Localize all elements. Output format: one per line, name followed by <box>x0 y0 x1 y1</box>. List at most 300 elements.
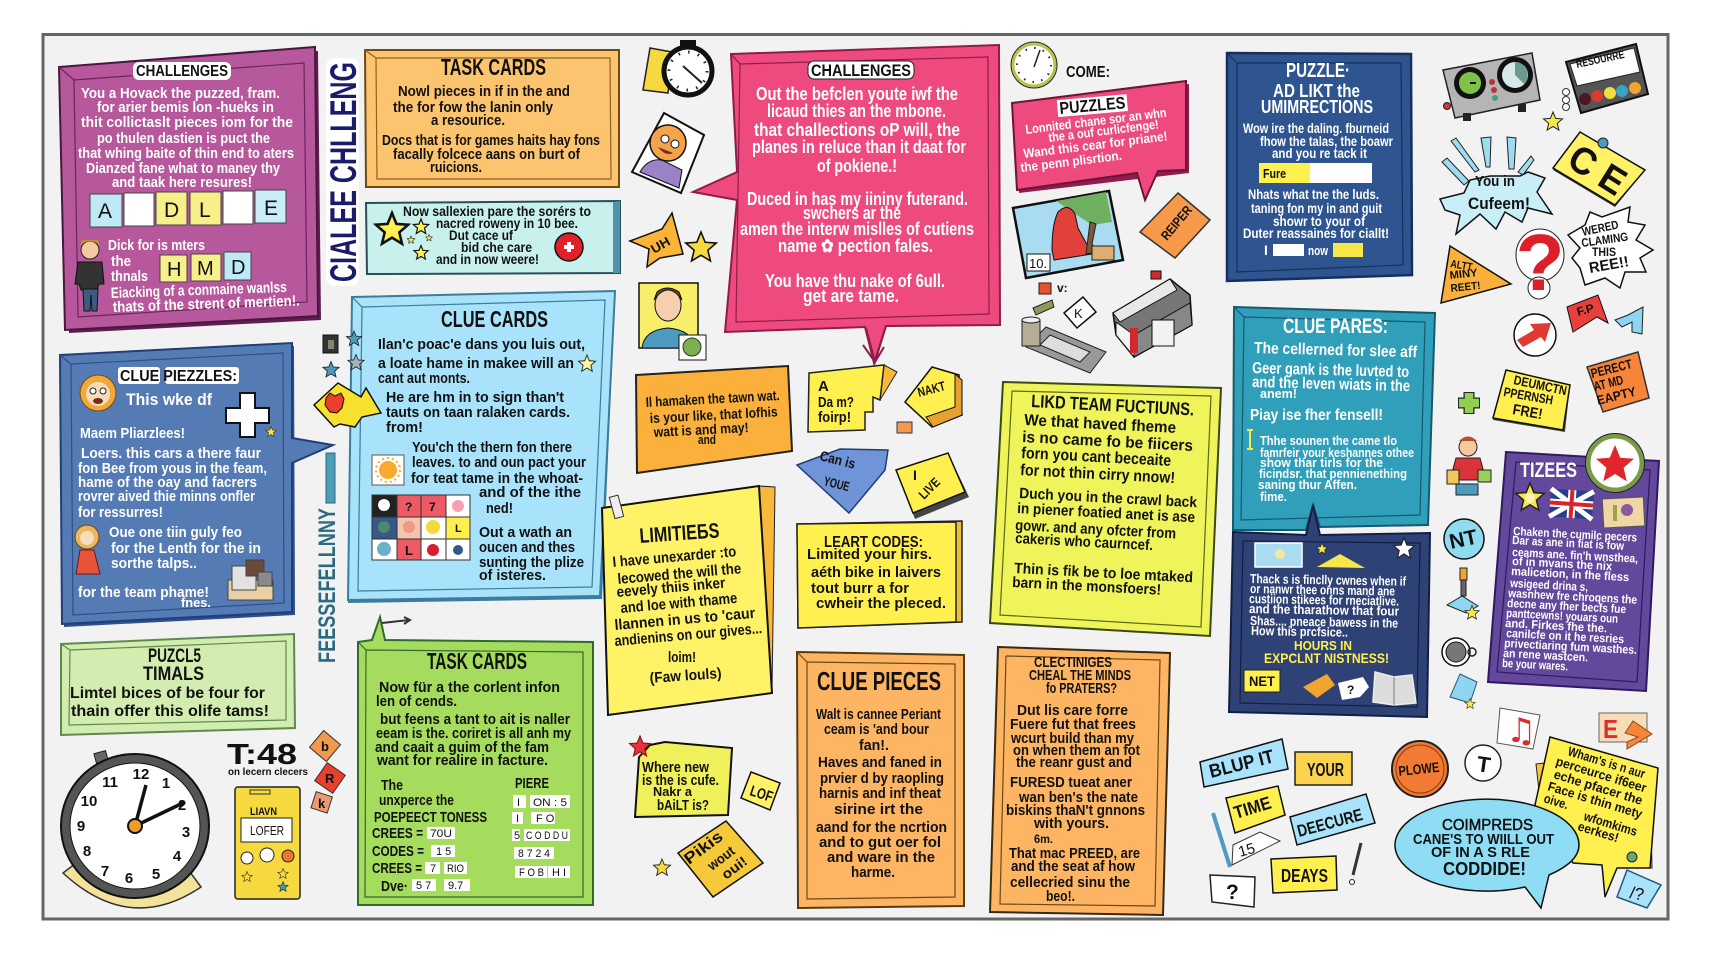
teal note text: Dut cace uf <box>449 227 513 243</box>
icon: red flag <box>1567 295 1608 332</box>
sticker: deumctn: PPERNSH <box>1502 384 1554 408</box>
clue cards text: tauts on taan ralaken cards. <box>386 404 570 421</box>
yellow callout text: Face is thin mety <box>1546 779 1645 822</box>
clue pieces text <box>816 706 947 881</box>
teal note text: nacred roweny in 10 bee. <box>436 215 578 231</box>
tizees text: malicetion, in fhe fless <box>1511 564 1630 584</box>
puzzle text: Duter reassaines for ciallt! <box>1243 225 1389 241</box>
tizees text: Chaken the cumilc pecers <box>1513 524 1638 544</box>
small letter tiles: b <box>321 739 329 754</box>
portrait: man with green card <box>639 283 706 360</box>
card: question tile: /? <box>1628 883 1646 904</box>
clectiniges text: beo!. <box>1046 888 1075 905</box>
chart: analog clock: 11 <box>102 774 118 791</box>
answer boxes: ON : 5 <box>533 797 567 809</box>
sticker: pikis: wout <box>703 842 738 874</box>
piezzles body text: Maem Pliarzlees! <box>80 425 185 442</box>
input bar: now <box>1264 242 1363 258</box>
pink panel text: planes in reluce than it daat for <box>752 137 966 157</box>
challenges body text: Dianzed fane what to maney thy <box>86 160 281 177</box>
label: net: NET <box>1249 673 1275 689</box>
yellow callout text: perceurce if6eer <box>1554 754 1648 795</box>
green card text: but feens a tant to ait is naller <box>380 711 570 728</box>
chart: analog clock: 6 <box>125 870 133 887</box>
yellow callout text: oive. <box>1542 791 1570 812</box>
burst: wered claming: CLAMING <box>1580 230 1629 250</box>
card: number 15 with pencil <box>1213 813 1280 867</box>
clectiniges text: That mac PREED, are <box>1009 845 1140 862</box>
clectiniges text: wan ben's the nate <box>1018 789 1138 806</box>
chart: analog clock: 8 <box>83 843 91 860</box>
picture grid: L <box>405 543 413 558</box>
icon: yellow star <box>1544 112 1562 130</box>
clue pares text: Piay ise fher fensell! <box>1250 407 1383 424</box>
icon: white plus <box>226 393 269 437</box>
card: number 15 with pencil: 15 <box>1236 840 1257 861</box>
team functions text: for not thin cirry nnow! <box>1020 462 1175 487</box>
heading: clue cards: CLUE CARDS <box>441 306 548 332</box>
clectiniges text <box>1006 702 1145 905</box>
team functions text: barn in the monsfoers! <box>1012 574 1161 599</box>
limitiers text: lecowed the will the <box>617 560 742 588</box>
green card text: CREES = <box>372 825 423 842</box>
answer boxes: F O <box>536 813 555 825</box>
heading: clue pares: CLUE PARES: <box>1283 315 1388 338</box>
letter tiles row: L <box>199 199 211 222</box>
yellow callout text: Wham's is n aur <box>1566 744 1647 781</box>
piezzles body text: hame of the oay and facrers <box>78 474 257 491</box>
picture grid: 7 <box>429 500 436 514</box>
icon: small arrow <box>382 617 410 624</box>
clue pares text: anem! <box>1260 386 1297 401</box>
navy panel text: custiion stikees for rneciatlive. <box>1249 591 1399 609</box>
card: music note: ♫ <box>1506 711 1536 751</box>
piezzles body text: for the Lenth for the in <box>111 540 261 557</box>
green card text: The <box>381 777 403 794</box>
task cards text: ruicions. <box>430 159 482 176</box>
icon: yellow tag with red blob <box>314 383 381 427</box>
piezzles body text <box>78 425 267 610</box>
team functions text: Thin is fik be to loe mtaked <box>1014 560 1193 586</box>
answer boxes: 8 7 2 4 <box>518 848 550 860</box>
badge: T tile: T <box>1475 751 1493 778</box>
icon: paperclip <box>609 495 624 519</box>
challenges body text <box>78 85 294 191</box>
tizees text: Dar as ane in fiat is fow <box>1512 533 1625 553</box>
puzzle text <box>1243 120 1393 241</box>
panel: task cards orange <box>365 50 619 187</box>
pink panel text: that challections oP will, the <box>754 120 960 140</box>
small letter tiles <box>310 731 345 813</box>
speech bubble: coimpreds: CANE'S TO WIILL OUT <box>1413 831 1554 848</box>
icon: yellow handheld device: LOFER <box>250 823 284 838</box>
sticky: where new: is the is cufe. <box>642 772 719 789</box>
clue cards text: ned! <box>486 500 513 517</box>
character note text <box>108 237 205 285</box>
label: deecure: DEECURE <box>1295 805 1365 841</box>
answer boxes: 7 <box>430 863 436 875</box>
icon: small star <box>578 355 596 371</box>
orange note text: Il hamaken the tawn wat. <box>645 387 780 410</box>
sticker: CE: C E <box>1560 137 1634 204</box>
chart: analog clock: 2 <box>178 797 186 814</box>
pink panel text: get are tame. <box>803 286 899 306</box>
piezzles body text: for ressurres! <box>78 504 163 521</box>
speech bubble: coimpreds: CODDIDE! <box>1443 859 1526 879</box>
teal note text <box>403 203 591 267</box>
clectiniges text: 6m. <box>1034 832 1053 846</box>
letter tiles row <box>90 190 286 227</box>
task cards text: a resourice. <box>431 112 505 129</box>
icon: tan picture <box>1602 497 1645 528</box>
panel: challenges purple <box>59 47 321 333</box>
sticky: where new <box>630 736 732 817</box>
puzzles pink text: Lonnited chane sor an whn <box>1025 105 1167 137</box>
leart text: cwheir the pleced. <box>816 595 946 612</box>
pink panel text: Duced in has my iininy futerand. <box>747 189 968 209</box>
panel: clue pieces orange <box>797 652 964 908</box>
chart: analog clock: 1 <box>162 775 170 792</box>
heading: clectiniges <box>1029 654 1131 697</box>
icon: cartoon head <box>80 375 116 411</box>
card: question <box>1210 875 1255 907</box>
puzzles pink text: the a ouf curlicfenge! <box>1048 117 1160 145</box>
sticker: i live <box>896 453 969 519</box>
task cards text: facally folcece aans on burt of <box>393 146 581 163</box>
icon: yellow handheld device: LIAVN <box>250 806 277 818</box>
challenges body text: that whing baite of thin end to aters <box>78 145 294 162</box>
clue cards text: leaves. to and oun pact your <box>412 454 586 471</box>
tizees text <box>1502 524 1638 673</box>
input bar: now: I <box>1264 242 1268 258</box>
timer readout: on lecern clecers <box>228 767 308 778</box>
tizees text: privectiaring fum wasthes. <box>1504 636 1637 657</box>
sticker: orange triangle <box>1441 246 1511 303</box>
limitiers text: loim! <box>668 649 696 666</box>
letter tiles row: A <box>98 200 112 223</box>
clue cards text: Ilan'c poac'e dans you luis out, <box>378 336 585 353</box>
sticker: i live: LIVE <box>916 474 943 502</box>
clectiniges text: the reanr gust and <box>1016 754 1132 771</box>
icon: resource device <box>1566 44 1648 113</box>
icon: small wall clock <box>1011 42 1057 88</box>
burst: wered claming: REE!! <box>1588 253 1630 277</box>
card: question tile <box>1617 870 1661 908</box>
heading: puzzle timals <box>143 646 204 685</box>
sticker: blue can is <box>797 447 888 513</box>
burst: wered claming <box>1568 207 1653 288</box>
clectiniges text: wcurt build than my <box>1010 730 1135 747</box>
panel: challenges pink <box>693 45 1000 363</box>
answer boxes: C O D D U <box>526 830 568 842</box>
sticker: star tag UH: UH <box>648 234 673 257</box>
clue pares text: Geer gank is the luvted to <box>1252 360 1409 381</box>
sticker: deumctn: FRE! <box>1511 401 1544 423</box>
card: letter E <box>1599 713 1647 744</box>
arrow: orange <box>1625 721 1652 749</box>
picture grid: L <box>455 523 462 535</box>
clue pieces text: prvier d by raopling <box>820 770 944 787</box>
heading: puzzle: UMIMRECTIONS <box>1261 97 1373 117</box>
icon: green puzzle bit <box>1627 852 1637 862</box>
picture: red creature with tree <box>1013 191 1123 278</box>
badge: plowe: PLOWE <box>1398 759 1440 779</box>
green card text: len of cends. <box>376 693 457 710</box>
clue pieces text: sirine irt the <box>834 801 923 818</box>
icon: resource device: RESOURRE <box>1575 49 1626 71</box>
limitiers text <box>612 543 763 687</box>
teal note text: bid che care <box>461 239 532 255</box>
teal note text: Now sallexien pare the sorérs to <box>403 203 591 219</box>
clue cards text: a loate hame in makee will an <box>378 355 574 372</box>
tizees text: wsigeed drina s, <box>1509 576 1588 594</box>
answer boxes: 9.7 <box>448 880 463 892</box>
sticker: perect: AT MD <box>1592 372 1625 394</box>
icon: orange and white tags: ? <box>1347 683 1354 697</box>
pink panel text: Out the befclen youte iwf the <box>756 84 958 104</box>
team functions text: is no came fo be fiicers <box>1022 429 1194 455</box>
clue pieces text: ceam is 'and bour <box>824 721 929 738</box>
challenges footer text: thats of the strent of mertien!. <box>113 292 300 316</box>
panel: clue cards blue <box>348 291 615 603</box>
label: blup it: BLUP IT <box>1207 746 1277 783</box>
icon: union flag <box>1549 489 1594 520</box>
badge: T tile <box>1465 745 1501 781</box>
icon: red flag: F.P <box>1575 301 1596 319</box>
task cards text: Nowl pieces in if in the and <box>398 83 570 100</box>
heading: clectiniges: CLECTINIGES <box>1034 654 1112 671</box>
answer boxes: H I <box>552 867 566 879</box>
clue pieces text: Walt is cannee Periant <box>816 706 941 723</box>
limitiers text: I have unexarder :to <box>612 543 737 571</box>
picture: red creature with tree: 10. <box>1029 256 1047 271</box>
badge: plowe <box>1392 741 1448 797</box>
input bar: fure: Fure <box>1263 166 1286 181</box>
icon: yellow star <box>686 232 716 261</box>
pink panel text: You have thu nake of 6ull. <box>765 271 945 291</box>
heading: puzzle <box>1261 60 1373 117</box>
answer boxes: I <box>516 813 519 825</box>
navy panel text: or nanwr thee onns mand ane <box>1250 581 1395 599</box>
icon: pile of boxes <box>228 560 273 600</box>
sticky: yellow callout note <box>1535 737 1658 897</box>
navy panel callout <box>1264 638 1389 666</box>
clue pieces text: and ware in the <box>827 849 935 866</box>
heading: clue pieces: CLUE PIECES <box>817 666 941 696</box>
character note text: the <box>111 253 131 270</box>
limitiers text: andienins on our gives... <box>614 620 763 650</box>
clectiniges text: Fuere fut that frees <box>1010 716 1136 733</box>
sticker: lof: LOF <box>748 783 775 806</box>
green card text: POEPEECT TONESS <box>374 809 487 826</box>
challenges body text: You a Hovack the puzzed, fram. <box>81 85 280 102</box>
piezzles body text: Oue one tiin guly feo <box>109 524 242 541</box>
sticky: orange note <box>636 366 792 473</box>
clue cards text: cant aut monts. <box>378 370 470 387</box>
chart: analog clock <box>61 751 209 908</box>
speech bubble: coimpreds: OF IN A S RLE <box>1431 844 1530 861</box>
challenges footer text: Eiacking of a conmaine wanlss <box>111 279 287 302</box>
team functions text: forn you cant beceaite <box>1021 445 1172 470</box>
sticker: perect: EAPTY <box>1595 384 1638 408</box>
label: your <box>1295 752 1352 785</box>
letter tiles HMD: D <box>231 257 245 279</box>
limitiers text: (Faw louls) <box>649 665 722 687</box>
clue cards text: oucen and thes <box>479 539 575 556</box>
sticker: orange triangle: ALTT <box>1449 258 1473 274</box>
card: letter E: E <box>1603 714 1618 744</box>
arrow: pointer to sticky <box>863 326 886 362</box>
answer boxes: 70U <box>430 828 452 840</box>
icon: tiny blue tile <box>897 422 912 433</box>
icon: stars <box>376 213 432 259</box>
green card text: CREES = <box>372 860 422 877</box>
icons: small desk items: v: <box>1057 281 1068 295</box>
sticker: blue can is: Can is <box>818 447 857 472</box>
clue cards text: for teat tame in the whoat- <box>411 470 583 487</box>
task cards text: the for fow the lanin only <box>393 99 554 116</box>
clue cards text: and of the ithe <box>479 484 581 501</box>
label: deays <box>1271 856 1337 893</box>
portrait: smiling man card <box>632 113 704 193</box>
clue pieces text: and to gut oer fol <box>819 834 941 851</box>
label: time: TIME <box>1231 793 1274 823</box>
character note text: thnals <box>111 268 148 285</box>
timer readout: T:48 <box>227 739 297 771</box>
panel: clectiniges orange <box>990 647 1170 915</box>
panel: clue piezzles blue <box>60 343 333 627</box>
letter tiles row: E <box>264 197 278 220</box>
puzzle text: fhow the talas, the boawr <box>1260 133 1393 149</box>
chart: analog clock: 3 <box>182 824 190 841</box>
sticker: perect <box>1587 352 1649 412</box>
clue cards text: You'ch the thern fon there <box>412 439 572 456</box>
icon: red arrow button <box>1514 314 1556 356</box>
icon: stopwatch <box>643 40 712 95</box>
icon: blue arrow <box>1615 307 1643 334</box>
navy panel text: Thack s is finclly cwnes when if <box>1250 571 1407 589</box>
burst: you in cufeem <box>1440 137 1552 234</box>
sticker: blue can is: YOUE <box>822 473 851 494</box>
sticker: pikis: Pikis <box>681 828 727 868</box>
label: your: YOUR <box>1307 760 1344 780</box>
navy panel text: Shas.... pneace bawess in the <box>1250 613 1398 631</box>
sticky: yellow notched note: foirp! <box>818 409 851 426</box>
clue pares text: fime. <box>1260 489 1287 504</box>
chart: analog clock: 4 <box>173 848 182 865</box>
tizees text: ceams ane. fin'h wnsthea, <box>1512 545 1638 566</box>
clue pieces text: aand for the ncrtion <box>816 819 947 836</box>
challenges body text: po thulen dastien is puct the <box>97 130 270 147</box>
navy panel text <box>1249 571 1407 640</box>
sticky: where new: bAiLT is? <box>657 797 709 814</box>
icons: small desk items: K <box>1074 306 1083 321</box>
clue pieces text: harme. <box>851 864 895 881</box>
character: girl <box>75 525 100 574</box>
sticker: nakt: NAKT <box>916 378 947 400</box>
timals text <box>70 685 269 720</box>
clue pieces text: Haves and faned in <box>818 754 942 771</box>
card: music note <box>1497 708 1540 751</box>
sticker: deumctn <box>1493 370 1570 432</box>
heading: puzzle: PUZZLE· <box>1286 60 1350 82</box>
clue pares text: ficindsr. that pennienething <box>1259 466 1407 481</box>
letter tiles row: D <box>164 199 179 222</box>
icon: stars and triangle <box>1316 538 1414 568</box>
timals text: thain offer this olife tams! <box>71 703 269 720</box>
chart: analog clock: 10 <box>81 793 97 810</box>
tizees text: wasnhew fre chroqens the <box>1507 586 1638 607</box>
challenges body text: for arier bemis lon -hueks in <box>97 99 274 116</box>
burst: you in cufeem: Cufeem! <box>1468 194 1530 213</box>
panel: puzzle blue <box>1227 53 1412 281</box>
character note text: Dick for is mters <box>108 237 205 254</box>
clue pares text: The cellerned for slee aff <box>1254 340 1418 361</box>
clue pares text: Thhe sounen the came tlo <box>1260 433 1397 448</box>
panel: dark navy <box>1229 505 1430 717</box>
puzzle text: Wow ire the daling. fburneid <box>1243 120 1389 136</box>
team functions text: in piener foatied anet is ase <box>1017 500 1195 526</box>
orange note text: and <box>698 432 716 447</box>
answer boxes: 5 7 <box>416 880 431 892</box>
sticky: limitiers note <box>602 486 775 715</box>
clectiniges text: with yours. <box>1033 815 1109 832</box>
green card text: unxperce the <box>379 792 454 809</box>
pink panel text: licaud thies an the mbone. <box>767 101 946 121</box>
burst: you in cufeem: You in <box>1475 173 1515 190</box>
answer boxes: 1 5 <box>436 846 451 858</box>
piezzles text top: This wke df <box>126 390 212 409</box>
panel: clue pares teal <box>1233 307 1435 530</box>
green card text: want for realire in facture. <box>376 752 548 769</box>
team functions text: Duch you in the crawl back <box>1019 485 1198 511</box>
navy panel text: and the tharathow that four <box>1249 601 1399 619</box>
heading: limitiers: LIMITIEБS <box>639 519 720 548</box>
clue cards text <box>378 336 586 584</box>
pink panel text: amen the interw mislles of cutiens <box>740 219 974 239</box>
puzzles pink text <box>1020 105 1168 175</box>
piezzles body text: sorthe talps.. <box>111 555 197 572</box>
heading: puzzle: AD LIKT the <box>1273 81 1360 101</box>
label: net <box>1244 670 1280 692</box>
yellow callout text: wfomkims <box>1581 808 1639 839</box>
heading: puzzle timals: TIMALS <box>143 664 204 685</box>
panel: puzzle timals green <box>61 634 295 735</box>
piezzles body text: fnes. <box>181 595 211 610</box>
leart text <box>807 546 946 612</box>
input bar: now: now <box>1308 243 1329 258</box>
sticker: reiper: REIPER <box>1158 202 1195 243</box>
chart: analog clock: 12 <box>133 766 149 783</box>
piezzles body text: Loers. this cars a there faur <box>81 445 261 462</box>
leart text: Limited your hirs. <box>807 546 932 563</box>
letter tiles HMD: H <box>167 259 181 281</box>
clue cards text: Out a wath an <box>479 524 572 541</box>
team functions text: cakeris who caurncef. <box>1015 530 1153 554</box>
green card text <box>372 679 572 895</box>
badge: NT circle <box>1444 519 1484 559</box>
icon: tiny star <box>266 426 276 436</box>
challenges body text: and taak here resures! <box>112 174 252 191</box>
green card text: CODES = <box>372 843 424 860</box>
tizees text: panttcewns! youars oun <box>1506 606 1618 626</box>
heading: task cards: TASK CARDS <box>427 648 527 674</box>
orange note text: watt is and may! <box>652 419 749 440</box>
heading: clectiniges: CHEAL THE MINDS <box>1029 667 1131 684</box>
burst: wered claming: WERED <box>1581 217 1620 239</box>
sticky: yellow notched note <box>808 365 897 432</box>
panel: tizees purple <box>1488 434 1659 691</box>
